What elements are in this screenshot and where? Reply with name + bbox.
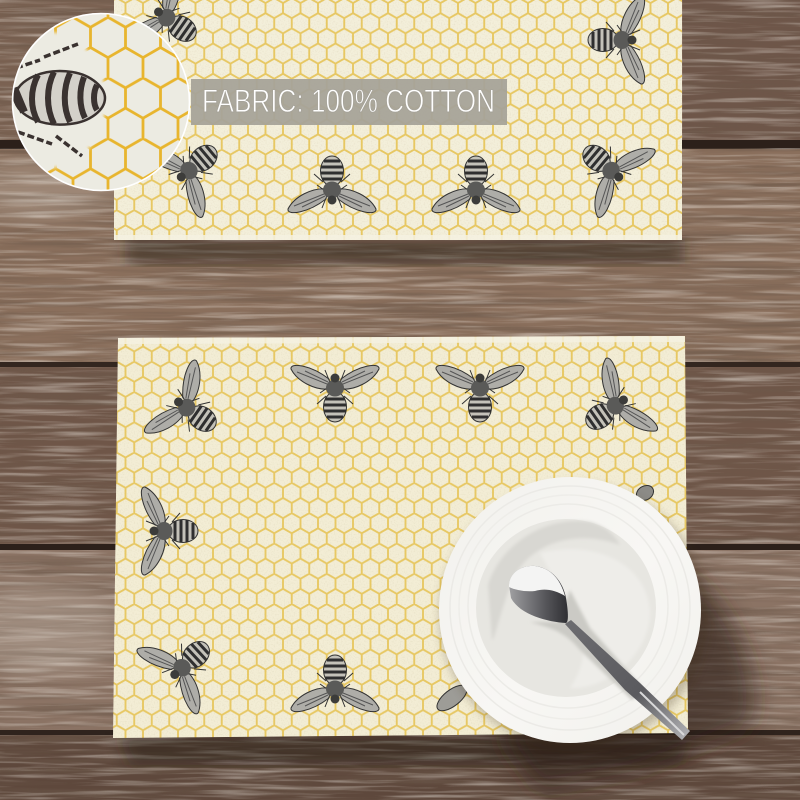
- top mat bee: corner left: [142, 0, 197, 42]
- top mat bee: corner right: [588, 0, 645, 84]
- top placemat: [114, 0, 682, 240]
- bottom mat bee: upper left: [144, 360, 217, 434]
- plate well: [476, 519, 656, 697]
- callout magnifier: fabric close-up: [12, 12, 190, 192]
- white bowl plate: [439, 477, 701, 743]
- callout label: fabric: [191, 79, 507, 125]
- bottom mat bee: top centre left: [291, 365, 379, 422]
- bottom mat bee: middle left: [141, 487, 198, 575]
- top mat bee: bottom centre right: [432, 156, 520, 213]
- plate well lit area: [540, 549, 650, 688]
- bottom mat bee: lower left: [136, 641, 210, 714]
- spoon shadow: [530, 590, 645, 700]
- top mat bee: lower right: [582, 144, 656, 218]
- shadow under top placemat: [125, 238, 685, 264]
- shadow of plate on placemat: [440, 484, 708, 748]
- shadow under bottom placemat: [118, 735, 690, 765]
- bottom placemat: [110, 330, 695, 742]
- spoon bowl: [509, 566, 568, 623]
- spoon handle highlight: [640, 692, 684, 735]
- callout label: fabric: FABRIC: 100% COTTON: [202, 83, 495, 119]
- shadow of plate on table: [500, 575, 754, 790]
- bottom mat bee: bottom centre: [291, 655, 379, 712]
- top mat bee: lower left: [162, 144, 218, 218]
- bottom mat bee: upper right: [585, 358, 658, 432]
- spoon: [509, 566, 690, 740]
- top mat bee: bottom centre left: [288, 156, 376, 213]
- spoon handle: [565, 620, 690, 740]
- plate well top shadow: [488, 521, 620, 640]
- bottom mat bee: top centre right: [436, 365, 524, 422]
- bottom mat bee part: behind plate, upper: [636, 485, 654, 501]
- spoon bowl highlight: [509, 566, 565, 596]
- bottom mat bee wing: behind plate, lower: [436, 684, 467, 712]
- magnified bee: [14, 44, 105, 156]
- fabric without honeycomb around bee: [0, 32, 106, 168]
